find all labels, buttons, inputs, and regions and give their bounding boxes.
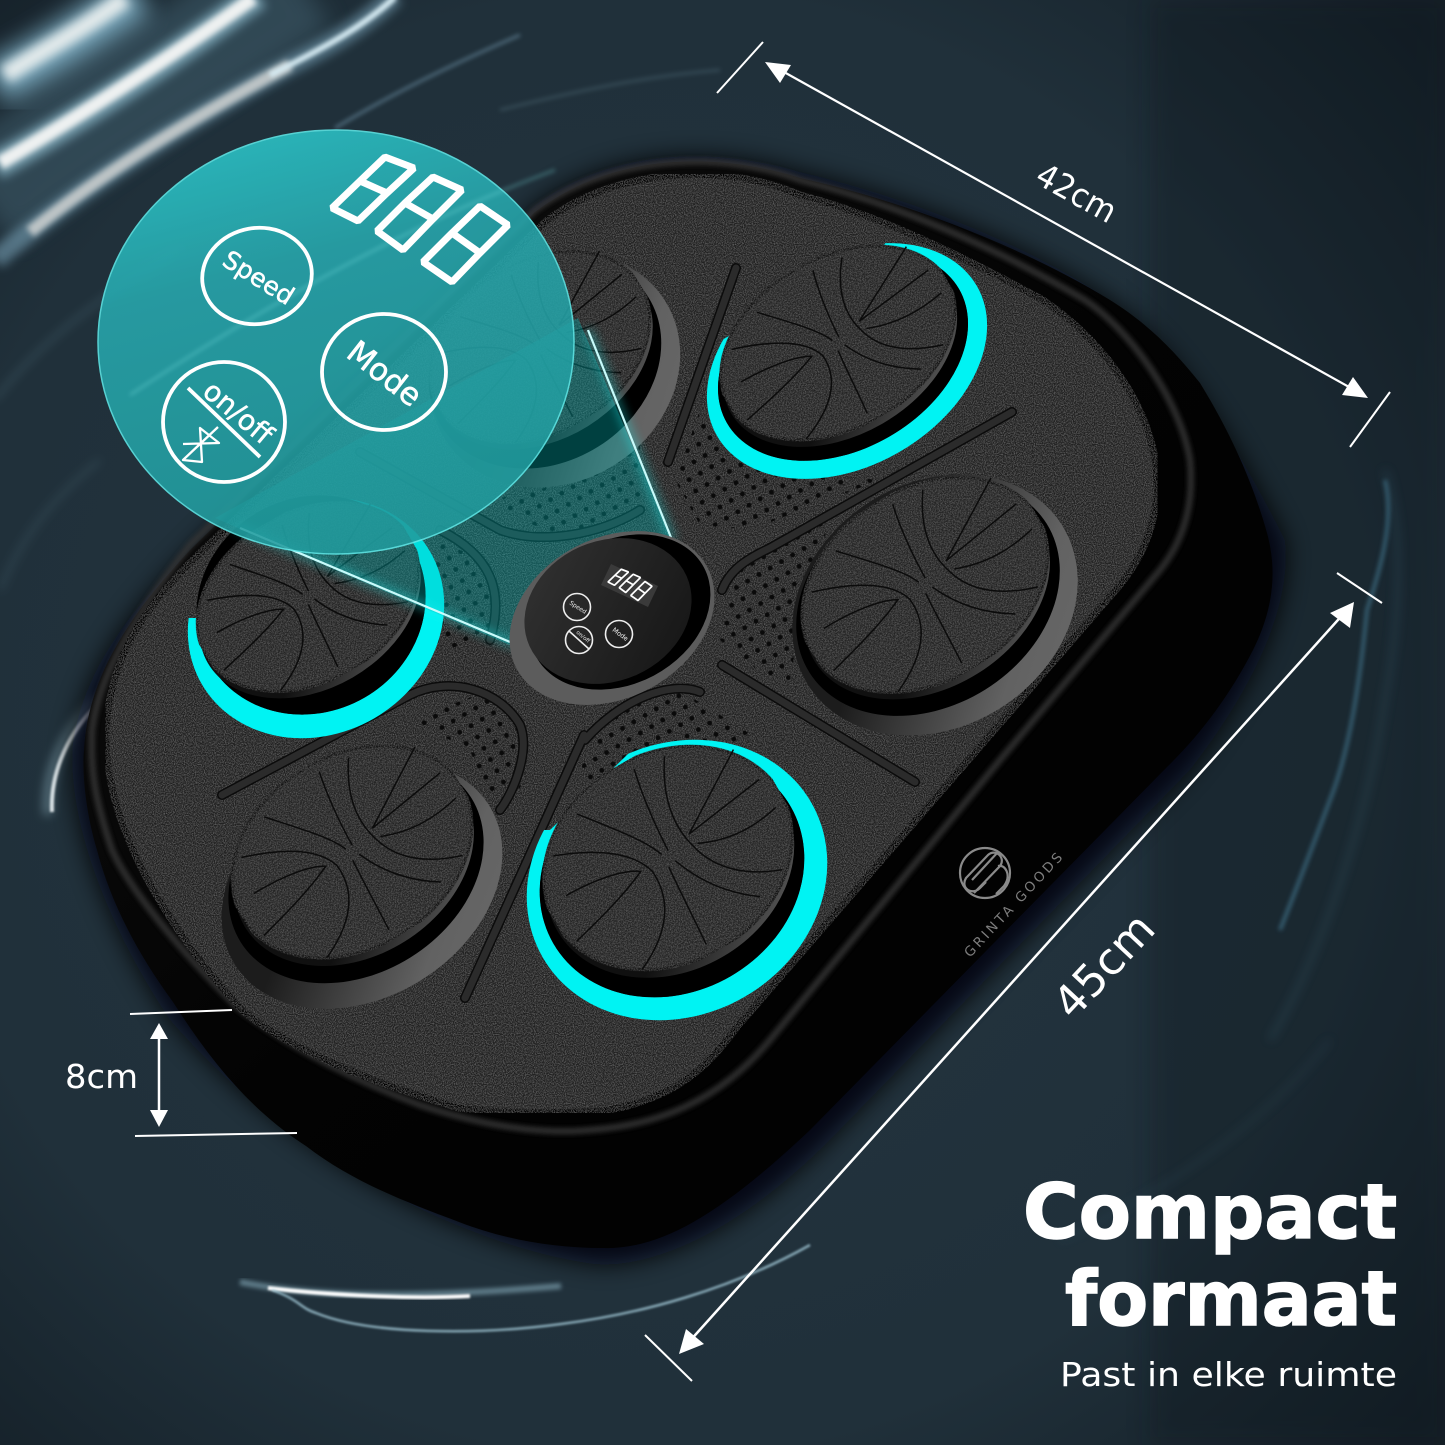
dimension: 45cm: 45cm <box>1043 903 1165 1029</box>
title <box>1023 1167 1397 1343</box>
body side <box>83 161 1273 1248</box>
speaker dot areas <box>410 410 880 800</box>
title: formaat <box>1065 1254 1397 1343</box>
pad: right <box>743 422 1127 788</box>
small mode button: Mode <box>611 626 630 643</box>
speed button: Speed <box>218 245 299 311</box>
body shadow <box>72 156 1286 1265</box>
control display <box>479 497 745 739</box>
dimension: 42cm <box>717 42 1390 447</box>
pad: bottom right with cyan light ring <box>526 740 828 1020</box>
digital display 888 <box>332 157 508 282</box>
magnifier lens: control panel enlarged <box>98 130 574 554</box>
product: boxing pad body <box>72 156 1286 1265</box>
small digits <box>601 564 658 607</box>
pad: top centre <box>385 206 725 534</box>
dimension: 8cm <box>65 1010 297 1136</box>
dimension: 8cm: 8cm <box>65 1057 138 1096</box>
pad: top right with cyan light ring <box>706 243 988 479</box>
brand logo: GRINTA GOODS <box>961 847 1068 961</box>
on/off and bluetooth button: on/off <box>197 374 280 452</box>
lens disc <box>98 130 574 554</box>
plate grooves <box>222 268 1012 998</box>
title: Compact <box>1023 1167 1397 1256</box>
top plate <box>106 174 1157 1113</box>
body shoulder highlight <box>92 162 1191 1131</box>
small speed button <box>564 594 590 620</box>
speed button <box>195 219 319 333</box>
small mode button <box>606 620 632 648</box>
lens shine <box>130 170 555 395</box>
small power button: on/off <box>575 630 591 645</box>
mode button: Mode <box>340 334 429 414</box>
pad: bottom left <box>175 703 549 1059</box>
subtitle: Past in elke ruimte <box>1060 1355 1397 1394</box>
beam from display to lens <box>215 318 676 645</box>
dimension: 42cm: 42cm <box>1030 155 1124 231</box>
on/off and bluetooth button <box>163 362 285 482</box>
pad: left with cyan light ring <box>188 500 444 738</box>
mode button <box>322 314 446 430</box>
small speed button: Speed <box>568 600 588 616</box>
dimension: 45cm <box>645 573 1382 1381</box>
small power button <box>566 626 592 654</box>
